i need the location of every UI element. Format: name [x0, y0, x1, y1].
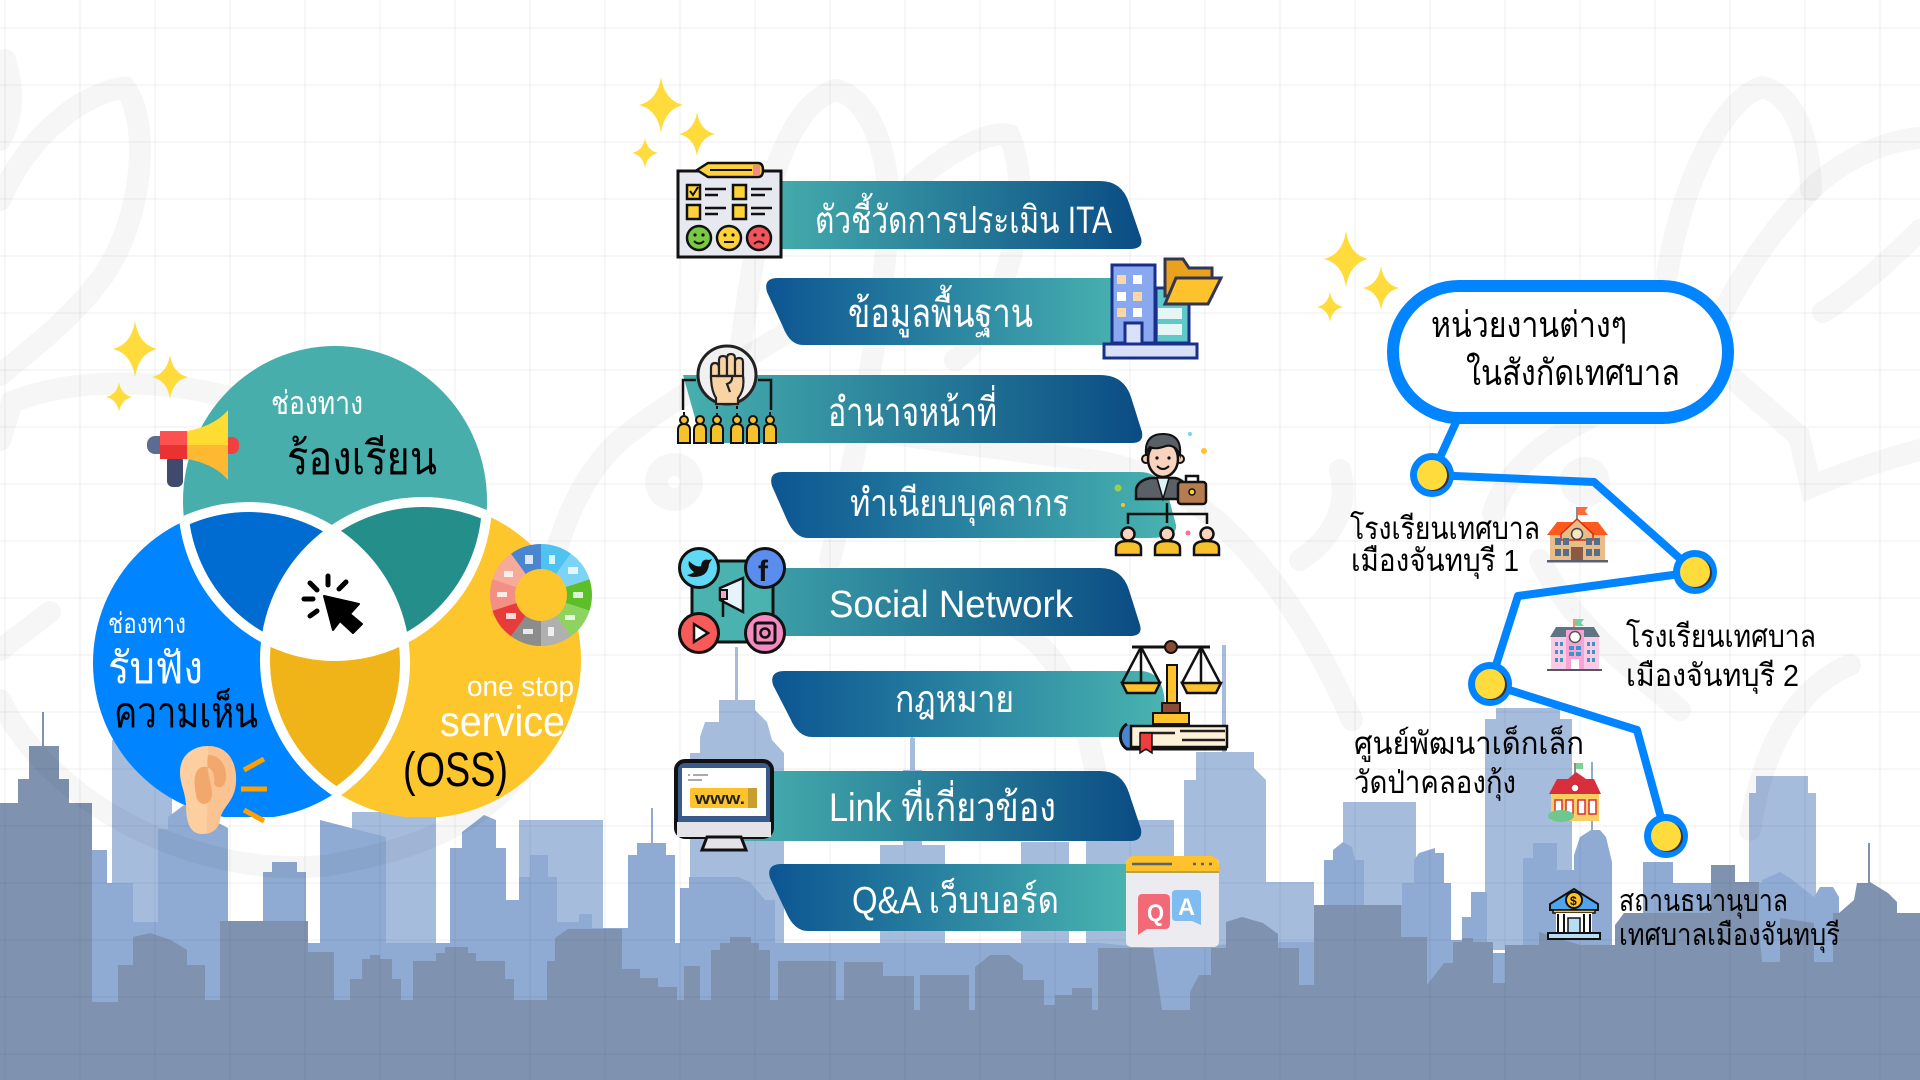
- label: basic info: ข้อมูลพื้นฐาน: [848, 284, 1033, 338]
- venn circle: complaints teal: [183, 346, 487, 525]
- node 3: [1468, 662, 1512, 706]
- sparkles: agencies: [1317, 231, 1399, 322]
- label: pawnshop: เทศบาลเมืองจันทบุรี: [1619, 919, 1840, 954]
- venn circle: one stop service yellow: [336, 515, 581, 817]
- background dots: [645, 453, 1610, 511]
- venn overlap: teal and blue: [190, 512, 323, 632]
- label: opinions: ความเห็น: [114, 688, 258, 736]
- panel: menu banner 6: [772, 671, 1165, 737]
- venn circle: listening blue: [93, 521, 336, 817]
- node 1: [1410, 453, 1454, 497]
- label: school 1: [1350, 511, 1540, 580]
- icon: pawnshop bank: $: [1570, 894, 1577, 908]
- label: complaints: ร้องเรียน: [287, 432, 437, 484]
- label: service: service: [440, 698, 565, 746]
- icon: QA web card: [1126, 856, 1219, 947]
- icon: fist and people: [683, 346, 771, 420]
- label: channel complaints: ช่องทาง: [271, 385, 363, 421]
- label: related links: Link ที่เกี่ยวข้อง: [829, 780, 1056, 830]
- panel: menu banner 8: [769, 864, 1130, 931]
- icon: social network: f: [758, 555, 769, 588]
- panel: menu banner 5: [694, 568, 1141, 636]
- label: pawnshop: [1619, 885, 1840, 954]
- icon: checklist with faces: [678, 163, 781, 257]
- panel: menu banner 4: [771, 472, 1176, 538]
- label: school 2: เมืองจันทบุรี 2: [1626, 658, 1799, 695]
- label: channel listening: ช่องทาง: [108, 608, 186, 639]
- icon: QA web card: A: [1178, 894, 1195, 921]
- panel: menu banner 2: [766, 278, 1130, 345]
- skyline: back layer: [112, 645, 1816, 952]
- icon: nursery house: [1548, 763, 1601, 822]
- label: child development centre: ศูนย์พัฒนาเด็กเล็ก: [1354, 725, 1584, 762]
- node 2: [1673, 550, 1717, 594]
- icon: people row: [678, 416, 776, 443]
- venn overlap: blue and yellow: [270, 647, 400, 786]
- sparkles: menu: [632, 77, 715, 168]
- venn overlap: centre: [272, 537, 398, 651]
- icon: QA web card: Q: [1147, 900, 1164, 927]
- panel: menu banner 7: [742, 771, 1141, 841]
- label: personnel directory: ทำเนียบบุคลากร: [850, 483, 1069, 526]
- panel: venn diagram: [93, 346, 583, 834]
- label: school 1: เมืองจันทบุรี 1: [1351, 543, 1519, 580]
- icon: monitor www: [676, 761, 772, 850]
- icon: cursor click: [304, 576, 362, 633]
- label: one stop: one stop: [467, 671, 574, 703]
- icon: office building and folder: [1104, 259, 1221, 358]
- label: child development centre: [1354, 725, 1584, 802]
- label: OSS: (OSS): [403, 744, 508, 797]
- icon: school 1: [1547, 507, 1608, 562]
- icon: megaphone: [147, 410, 239, 487]
- callout: agencies heading: หน่วยงานต่างๆ: [1431, 304, 1627, 345]
- label: QA webboard: Q&A เว็บบอร์ด: [852, 877, 1059, 922]
- panel: menu banner 1: [760, 181, 1142, 249]
- background swirl pattern: [0, 60, 1920, 867]
- panel: agencies timeline: [1350, 286, 1840, 954]
- skyline: middle layer: [92, 762, 1839, 1010]
- icon: scales of justice on book: [1120, 641, 1227, 753]
- venn overlap: teal and yellow: [341, 507, 486, 632]
- node 4: [1644, 814, 1688, 858]
- icon: ear: [180, 746, 267, 834]
- panel: menu banner 3: [683, 375, 1142, 443]
- callout: agencies heading: ในสังกัดเทศบาล: [1466, 352, 1680, 393]
- icon: school 2: [1547, 619, 1602, 671]
- icon: social network: [680, 548, 784, 652]
- label: ITA indicators: ตัวชี้วัดการประเมิน ITA: [815, 192, 1113, 242]
- icon: service ring: [497, 555, 583, 636]
- label: child development centre: วัดป่าคลองกุ้ง: [1354, 765, 1516, 802]
- icon: pawnshop bank: [1548, 889, 1600, 939]
- label: pawnshop: สถานธนานุบาล: [1619, 885, 1788, 920]
- label: school 2: โรงเรียนเทศบาล: [1626, 619, 1816, 654]
- sparkles: venn: [106, 321, 188, 412]
- label: listen: รับฟัง: [108, 644, 203, 693]
- icon: monitor www: www.: [694, 789, 745, 808]
- callout: agencies heading: [1393, 286, 1728, 418]
- connector lines: [1432, 420, 1695, 836]
- icon: manager with org chart: [1114, 432, 1219, 555]
- label: school 1: โรงเรียนเทศบาล: [1350, 511, 1540, 546]
- skyline: front layer: [0, 712, 1920, 1080]
- label: social network: Social Network: [829, 584, 1074, 626]
- label: law: กฎหมาย: [895, 679, 1014, 721]
- label: authority: อำนาจหน้าที่: [828, 385, 997, 435]
- label: school 2: [1626, 619, 1816, 695]
